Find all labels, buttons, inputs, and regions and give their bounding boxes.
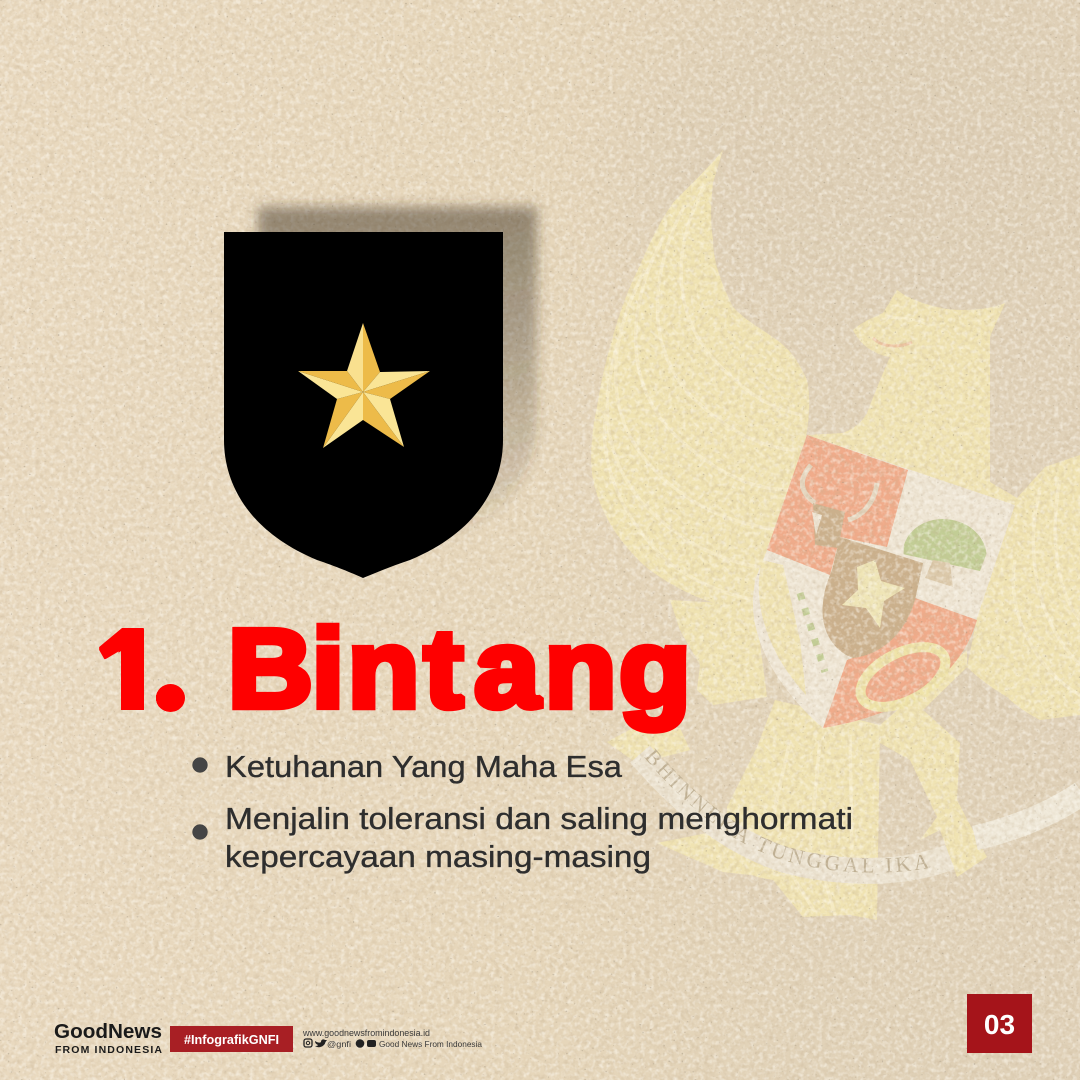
ribbon with motto bbox=[630, 746, 1080, 884]
hashtag badge bbox=[170, 1026, 293, 1052]
bullet list bbox=[192, 749, 853, 874]
icon: youtube bbox=[367, 1040, 376, 1047]
central shield bbox=[753, 435, 1015, 728]
page number: 03 bbox=[984, 1009, 1015, 1040]
website and social handles: Good News From Indonesia bbox=[379, 1039, 482, 1049]
hashtag badge: #InfografikGNFI bbox=[184, 1033, 279, 1047]
bullet 2: Menjalin toleransi dan saling menghormati bbox=[225, 801, 853, 836]
title bbox=[99, 622, 687, 734]
ribbon with motto: BHINNEKA TUNGGAL IKA bbox=[644, 748, 930, 872]
title: 1. bbox=[96, 607, 183, 731]
left claws bbox=[607, 728, 767, 877]
logo: GoodNews from Indonesia: FROM INDONESIA bbox=[55, 1044, 162, 1056]
shield bbox=[224, 232, 503, 578]
quadrant: yellow field with rice bbox=[759, 560, 825, 695]
page number bbox=[967, 994, 1032, 1053]
quadrant: chain on red bbox=[823, 598, 977, 728]
logo: GoodNews from Indonesia: GoodNews bbox=[54, 1020, 162, 1043]
logo: GoodNews from Indonesia bbox=[54, 1020, 162, 1056]
website and social handles: @gnfi bbox=[327, 1039, 351, 1049]
neck and head bbox=[807, 290, 1015, 505]
icon: gold star bbox=[298, 323, 430, 448]
quadrant: bull head on red bbox=[767, 435, 908, 575]
right wing bbox=[967, 455, 1080, 720]
icon: twitter bbox=[315, 1039, 327, 1047]
bullet 2 bbox=[192, 801, 853, 874]
bullet 2: kepercayaan masing-masing bbox=[225, 839, 651, 874]
website and social handles bbox=[302, 1028, 482, 1049]
footer bbox=[54, 994, 1032, 1056]
centre: star on brown bbox=[822, 537, 923, 658]
title: Bintang bbox=[228, 607, 691, 731]
lower left feathers bbox=[670, 600, 767, 705]
left wing bbox=[591, 150, 809, 610]
bullet 1: Ketuhanan Yang Maha Esa bbox=[225, 749, 623, 784]
shield shadow bbox=[258, 207, 537, 553]
website and social handles: www.goodnewsfromindonesia.id bbox=[302, 1028, 430, 1038]
quadrant: banyan tree on white bbox=[902, 514, 990, 587]
black shield with star bbox=[224, 232, 503, 578]
watermark: Garuda emblem bbox=[592, 150, 1080, 920]
tail bbox=[727, 700, 880, 920]
icon: facebook bbox=[356, 1039, 364, 1048]
right leg bbox=[880, 650, 987, 877]
icon: instagram bbox=[304, 1039, 312, 1047]
